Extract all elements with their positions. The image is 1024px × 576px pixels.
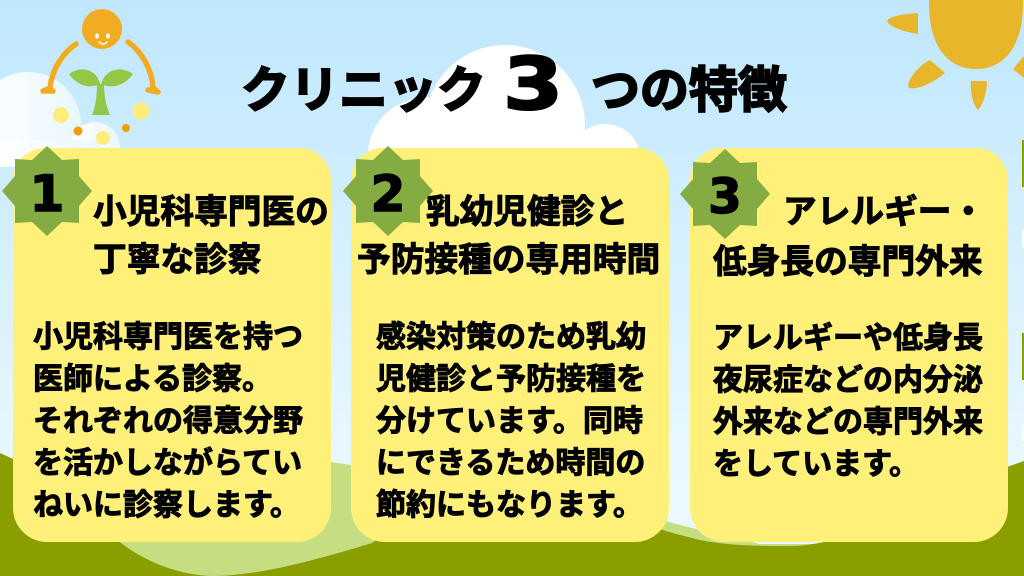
badge: number 1 — [2, 146, 92, 236]
text: feature 1 body: を活かしながらてい — [33, 447, 302, 480]
text: feature 2 body — [376, 320, 646, 522]
panel: feature 3 — [690, 148, 1008, 542]
text: feature 3 body: をしています。 — [713, 448, 919, 481]
badge: number 2 — [343, 146, 433, 236]
panel: feature 2 — [351, 148, 669, 542]
text: feature 2 body: 節約にもなります。 — [376, 489, 643, 522]
icon: sun top right — [887, 0, 1024, 110]
text: feature 3 body: 夜尿症などの内分泌 — [713, 364, 983, 397]
sun face — [82, 9, 122, 49]
text: feature 3 body: 外来などの専門外来 — [713, 406, 983, 439]
heading: feature 1 line 1: 小児科専門医の — [93, 193, 329, 231]
sprout — [69, 69, 133, 115]
heading: feature 2 line 2: 予防接種の専用時間 — [357, 241, 660, 279]
title number 3: 3 — [503, 42, 563, 126]
logo: sun character with sprout — [40, 9, 161, 145]
text: feature 1 body: それぞれの得意分野 — [33, 405, 303, 438]
text: feature 1 body: ねいに診察します。 — [33, 489, 300, 522]
text: feature 1 body: 小児科専門医を持つ — [33, 321, 303, 354]
heading: feature 2 line 1: 乳幼児健診と — [426, 193, 628, 231]
heading: feature 3 line 1: アレルギー・ — [783, 193, 985, 231]
heading: feature 3 line 2: 低身長の専門外来 — [713, 243, 983, 281]
text: feature 2 body: にできるため時間の — [376, 447, 645, 480]
title suffix: つの特徴 — [591, 64, 787, 118]
right arm — [128, 42, 158, 92]
left arm — [43, 44, 76, 91]
heading: feature 1 line 2: 丁寧な診察 — [93, 241, 261, 279]
text: feature 2 body: 感染対策のため乳幼 — [376, 321, 646, 354]
text: feature 1 body: 医師による診察。 — [33, 363, 272, 396]
panel: feature 1 — [13, 148, 331, 542]
text: feature 1 body — [32, 320, 303, 522]
badge: number 2: 2 — [371, 165, 405, 223]
text: feature 3 body: アレルギーや低身長 — [713, 322, 983, 355]
text: feature 2 body: 分けています。同時 — [376, 405, 643, 438]
badge: number 3 — [680, 149, 770, 239]
title: クリニック — [241, 64, 486, 118]
badge: number 1: 1 — [30, 165, 64, 223]
text: feature 3 body — [712, 321, 984, 481]
dots — [53, 102, 150, 145]
text: feature 2 body: 児健診と予防接種を — [376, 363, 646, 396]
badge: number 3: 3 — [708, 169, 742, 225]
